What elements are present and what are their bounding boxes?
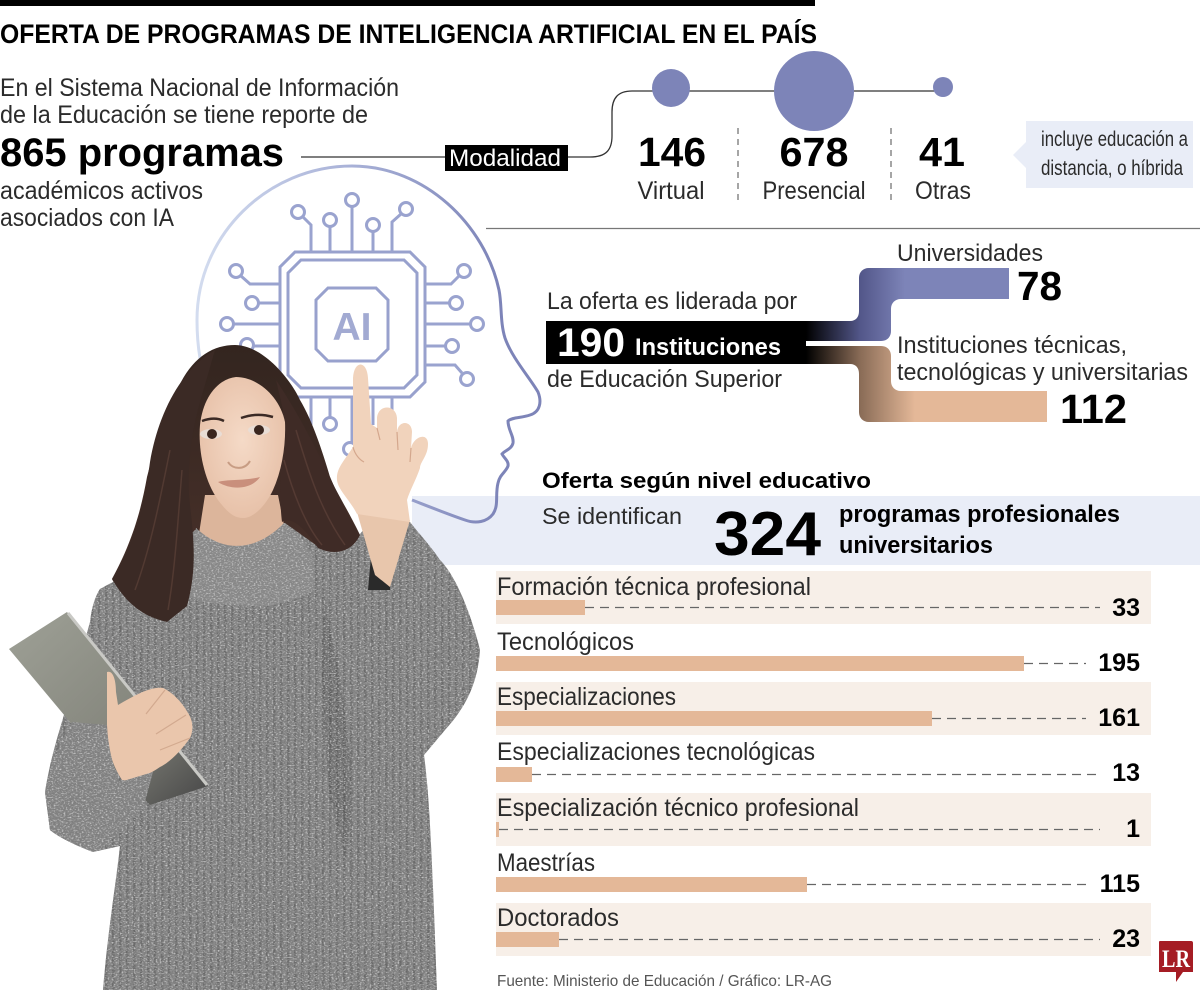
level highlight text: programas profesionales <box>839 501 1120 528</box>
row: Tecnológicos <box>496 628 1140 677</box>
modality figures: 41 <box>919 129 965 175</box>
circuit pins <box>220 194 484 456</box>
row: Maestrías: 115 <box>1100 870 1140 898</box>
level highlight text: 324 <box>714 500 822 569</box>
face <box>200 377 285 518</box>
top bar <box>0 0 815 6</box>
level heading: Oferta según nivel educativo <box>542 468 871 493</box>
institutions total: 190 <box>557 321 625 365</box>
callout <box>1013 121 1193 188</box>
institutions intro <box>547 288 797 393</box>
mouth <box>218 477 260 488</box>
institutions total <box>546 321 806 365</box>
institutions intro: de Educación Superior <box>547 366 782 393</box>
nose <box>228 461 250 468</box>
modality figures: Otras <box>915 177 971 205</box>
hair back <box>112 345 360 622</box>
intro text: de la Educación se tiene reporte de <box>0 101 368 129</box>
row: Formación técnica profesional <box>496 571 1151 624</box>
technical institutions value: Instituciones técnicas, <box>897 332 1127 359</box>
modality figures <box>638 129 971 205</box>
modality connector <box>301 91 943 157</box>
photo: woman with tablet <box>9 345 480 990</box>
sleeve opening <box>368 545 392 590</box>
head outline <box>197 166 540 522</box>
title: OFERTA DE PROGRAMAS DE INTELIGENCIA ARTIFICIAL EN EL PAÍS <box>0 18 817 49</box>
row: Especialización técnico profesional: Especialización técnico profesional <box>497 794 859 822</box>
universities value <box>897 240 1062 309</box>
row: Maestrías <box>496 849 1140 898</box>
left hand <box>107 672 192 780</box>
eyes <box>200 425 270 439</box>
raised hand <box>337 364 428 522</box>
universities value: Universidades <box>897 240 1043 267</box>
technical institutions value: 112 <box>1060 386 1127 432</box>
AI label: AI <box>332 306 372 349</box>
sweater <box>45 522 480 990</box>
row: Doctorados: Doctorados <box>497 904 619 932</box>
row: Maestrías: Maestrías <box>497 849 595 877</box>
level highlight text: Se identifican <box>542 503 682 529</box>
modality figures: Virtual <box>638 177 704 205</box>
row: Especialización técnico profesional <box>496 793 1151 846</box>
intro text: asociados con IA <box>0 204 174 232</box>
left cuff <box>45 722 153 852</box>
modality label: Modalidad <box>449 145 561 172</box>
modality figures: 678 <box>780 129 848 175</box>
eyebrows <box>202 415 273 421</box>
chip <box>280 252 425 397</box>
row: Tecnológicos: Tecnológicos <box>497 628 634 656</box>
row: Doctorados: 23 <box>1112 925 1140 953</box>
modality figures: 146 <box>638 129 706 175</box>
modality figures: Presencial <box>762 177 866 205</box>
row: Doctorados <box>496 903 1151 956</box>
tablet <box>9 612 208 805</box>
level highlight text: universitarios <box>839 532 993 559</box>
row: Especializaciones: 161 <box>1098 704 1140 732</box>
icon: AI head <box>197 166 540 522</box>
row: Especialización técnico profesional: 1 <box>1126 815 1140 843</box>
modality bubbles <box>652 51 953 131</box>
row: Especializaciones <box>496 682 1151 735</box>
hair front <box>112 350 360 622</box>
row: Especializaciones tecnológicas <box>496 738 1140 787</box>
level highlight text <box>542 500 1120 569</box>
row: Tecnológicos: 195 <box>1098 649 1140 677</box>
technical institutions value: tecnológicas y universitarias <box>897 359 1188 386</box>
ribbon: technical institutions <box>806 346 1047 422</box>
neck <box>198 495 286 568</box>
intro text: académicos activos <box>0 177 203 205</box>
universities value: 78 <box>1017 263 1062 309</box>
row: Formación técnica profesional: Formación técnica profesional <box>497 573 811 601</box>
row: Especializaciones tecnológicas: 13 <box>1112 759 1140 787</box>
source: Fuente: Ministerio de Educación / Gráfico: LR-AG <box>497 973 832 990</box>
band: level highlight <box>412 496 1200 565</box>
logo: LR: LR <box>1162 946 1191 973</box>
institutions intro: La oferta es liderada por <box>547 288 797 315</box>
collar <box>187 523 314 606</box>
intro text <box>0 74 399 232</box>
technical institutions value <box>897 332 1188 432</box>
logo: LR <box>1159 941 1193 982</box>
raised forearm <box>357 512 410 587</box>
row: Especializaciones: Especializaciones <box>497 683 676 711</box>
ribbon: universities <box>806 268 1009 341</box>
intro text: En el Sistema Nacional de Información <box>0 74 399 102</box>
institutions total: Instituciones <box>635 334 781 361</box>
arm shading <box>322 600 351 860</box>
bar chart: programs by level <box>496 571 1151 956</box>
row: Formación técnica profesional: 33 <box>1112 594 1140 622</box>
row: Especializaciones tecnológicas: Especializaciones tecnológicas <box>497 738 815 766</box>
intro text: 865 programas <box>0 131 284 175</box>
